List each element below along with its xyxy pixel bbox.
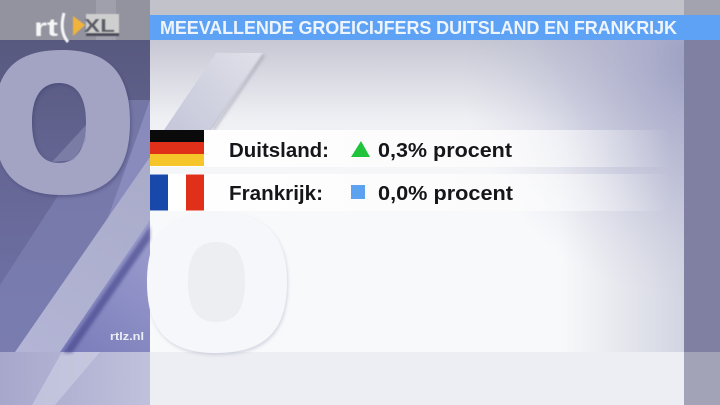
title bar — [150, 15, 720, 40]
logo bracket — [62, 13, 68, 42]
icon: blue square — [351, 185, 365, 199]
icon: percent upper ring — [0, 50, 132, 197]
icon: percent slash — [15, 53, 264, 353]
row: Duitsland — [150, 130, 670, 167]
logo: RTL XL — [34, 13, 119, 42]
logo wordmark: rtl: rt — [34, 14, 59, 42]
icon: French flag — [150, 174, 204, 210]
row: Frankrijk — [150, 174, 670, 211]
icon: German flag — [150, 130, 204, 166]
logo wordmark: XL: XL — [84, 16, 115, 36]
panel: right strip — [684, 0, 720, 405]
label: Duitsland: Duitsland: — [229, 140, 329, 162]
watermark: rtlz.nl: rtlz.nl — [110, 331, 144, 343]
value: Germany: 0,3% procent — [378, 140, 512, 162]
icon: percent lower ring — [147, 212, 288, 355]
icon: green up triangle — [351, 141, 370, 157]
title: MEEVALLENDE GROEICIJFERS DUITSLAND EN FRANKRIJK — [160, 18, 677, 38]
label: Frankrijk: Frankrijk: — [229, 183, 323, 205]
panel: left column — [0, 0, 150, 405]
logo play arrow — [73, 16, 85, 36]
value: France: 0,0% procent — [378, 183, 513, 205]
